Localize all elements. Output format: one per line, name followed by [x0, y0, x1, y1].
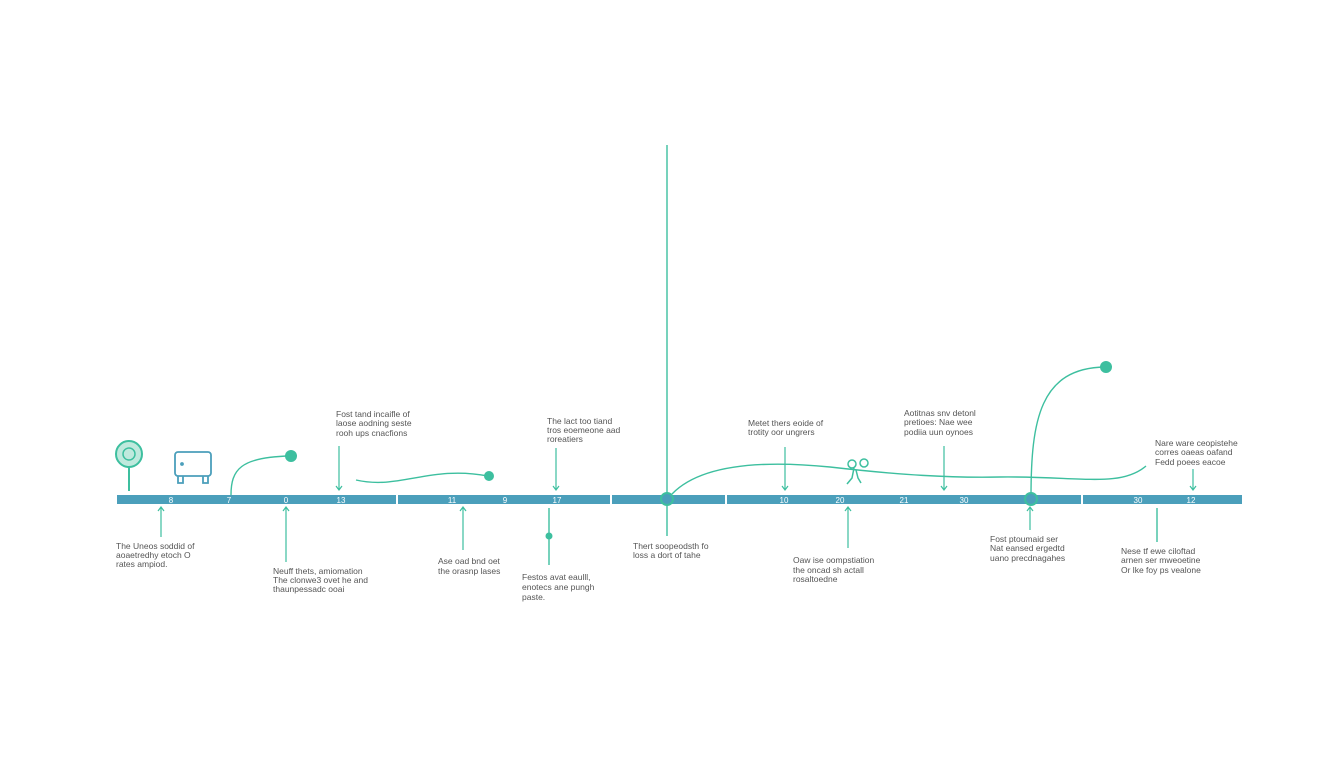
text blocks: The Uneos soddid of	[116, 541, 195, 551]
text blocks: trotity oor ungrers	[748, 427, 815, 437]
text blocks: The lact too tiand	[547, 416, 612, 426]
text blocks: corres oaeas oafand	[1155, 447, 1233, 457]
timeline bar	[117, 495, 1242, 505]
text blocks: Nese tf ewe ciloftad	[1121, 546, 1195, 556]
timeline bar: 20	[836, 496, 845, 505]
text blocks: roreatiers	[547, 434, 583, 444]
timeline bar: 17	[553, 496, 562, 505]
timeline bar: 21	[900, 496, 909, 505]
text blocks: thaunpessadc ooai	[273, 584, 344, 594]
timeline bar: 0	[284, 496, 289, 505]
text blocks	[116, 408, 1238, 602]
icon: figure	[847, 459, 868, 484]
timeline bar: 13	[337, 496, 346, 505]
text blocks: rates ampiod.	[116, 559, 168, 569]
text blocks: Fost ptoumaid ser	[990, 534, 1058, 544]
icon: box	[175, 452, 211, 483]
text blocks: podiia uun oynoes	[904, 427, 973, 437]
text blocks: rooh ups cnacfions	[336, 428, 407, 438]
icon: tree	[116, 441, 142, 491]
timeline bar: 9	[503, 496, 508, 505]
text blocks: Oaw ise oompstiation	[793, 555, 875, 565]
timeline bar: 30	[1134, 496, 1143, 505]
text blocks: uano precdnagahes	[990, 553, 1065, 563]
text blocks: rosaltoedne	[793, 574, 838, 584]
text blocks: enotecs ane pungh	[522, 582, 595, 592]
text blocks: Ase oad bnd oet	[438, 556, 501, 566]
timeline bar: 10	[780, 496, 789, 505]
text blocks: Neuff thets, amiomation	[273, 566, 363, 576]
text blocks: Nat eansed ergedtd	[990, 543, 1065, 553]
text blocks: aoaetredhy etoch O	[116, 550, 191, 560]
text blocks: Fedd poees eacoe	[1155, 457, 1226, 467]
text blocks: the orasnp lases	[438, 566, 500, 576]
text blocks: The clonwe3 ovet he and	[273, 575, 368, 585]
bar nodes	[661, 493, 1037, 505]
text blocks: Thert soopeodsth fo	[633, 541, 709, 551]
text blocks: the oncad sh actall	[793, 565, 864, 575]
timeline bar: 7	[227, 496, 232, 505]
text blocks: Nare ware ceopistehe	[1155, 438, 1238, 448]
text blocks: Aotitnas snv detonl	[904, 408, 976, 418]
timeline bar: 8	[169, 496, 174, 505]
text blocks: Festos avat eaulll,	[522, 572, 591, 582]
timeline bar: 30	[960, 496, 969, 505]
curves and markers	[231, 145, 1157, 565]
text blocks: pretioes: Nae wee	[904, 417, 973, 427]
timeline bar: 11	[448, 496, 457, 505]
text blocks: loss a dort of tahe	[633, 550, 701, 560]
arrows	[158, 446, 1196, 562]
text blocks: Or lke foy ps vealone	[1121, 565, 1201, 575]
timeline bar: 12	[1187, 496, 1196, 505]
text blocks: tros eoemeone aad	[547, 425, 621, 435]
text blocks: Fost tand incaifle of	[336, 409, 410, 419]
text blocks: Metet thers eoide of	[748, 418, 824, 428]
text blocks: paste.	[522, 592, 545, 602]
text blocks: laose aodning seste	[336, 418, 412, 428]
text blocks: arnen ser mweoetine	[1121, 555, 1201, 565]
